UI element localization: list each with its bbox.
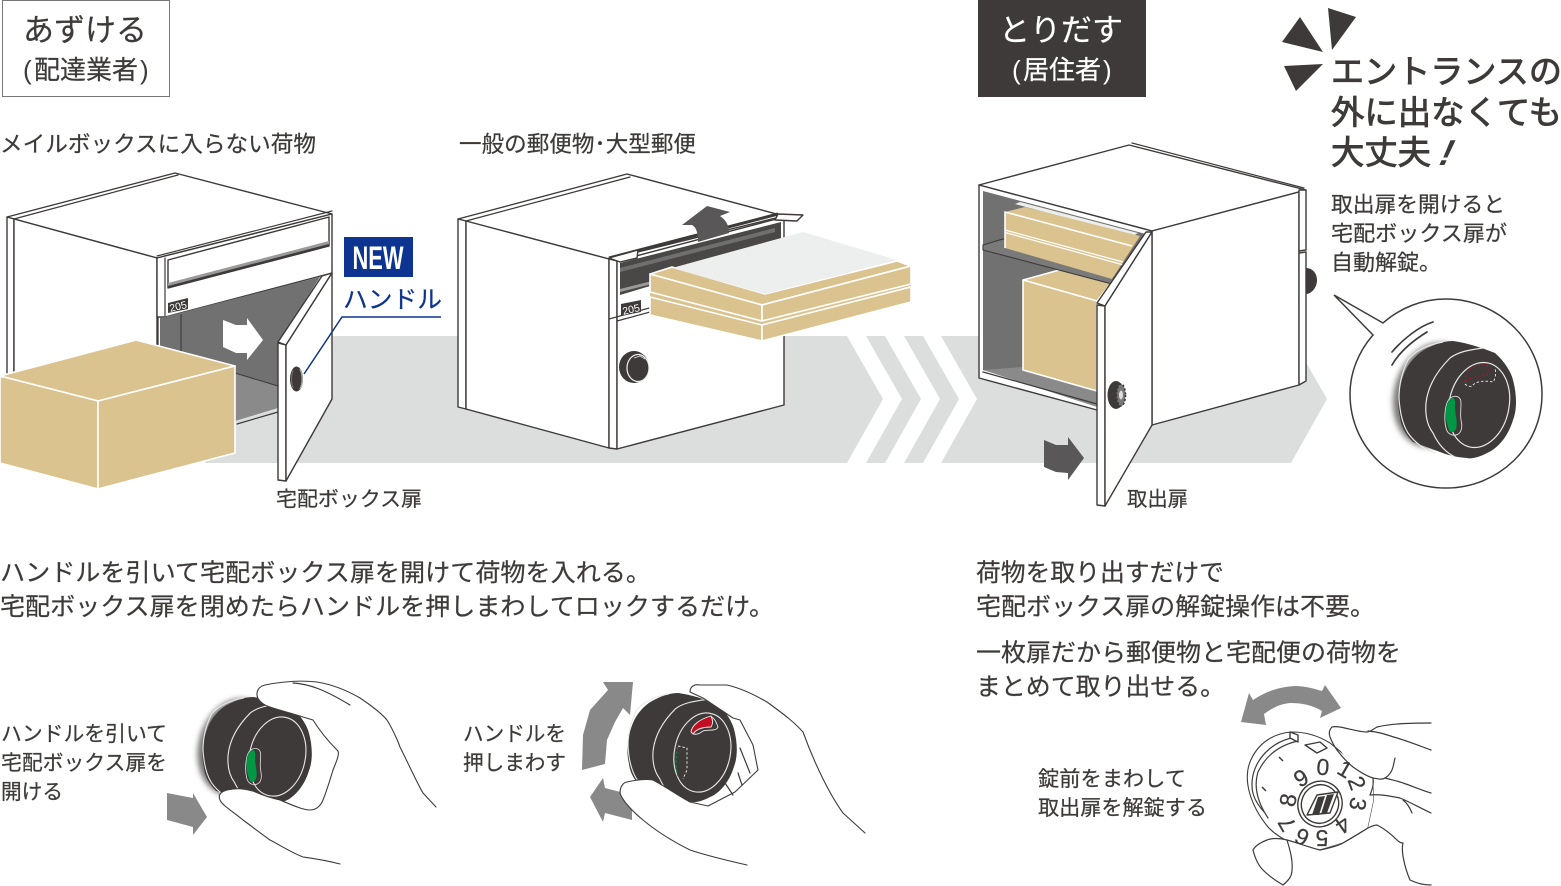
callout body text: 宅配ボックス扉が (1331, 221, 1507, 246)
illustration: mailbox with mail going in (458, 174, 911, 449)
upper shelf (983, 239, 1116, 284)
knob protruding at right (1306, 268, 1317, 294)
heading: あずける: あずける (23, 13, 147, 48)
red indicator (691, 716, 718, 734)
NEW badge (344, 237, 413, 277)
instruction text: right: 一枚扉だから郵便物と宅配便の荷物を (976, 639, 1401, 667)
dial center key (1290, 774, 1350, 834)
hand outline (620, 685, 865, 865)
instruction text: right: 宅配ボックス扉の解錠操作は不要。 (976, 593, 1375, 621)
room number plate: 205 (621, 302, 641, 318)
dial knob (619, 351, 649, 383)
step label: rotate handle (463, 723, 566, 775)
instruction text: left (0, 559, 774, 621)
box interior (160, 277, 320, 386)
instruction text: right (976, 559, 1401, 701)
arrow: white door direction (223, 318, 263, 360)
callout headline: 外に出なくても (1331, 94, 1561, 131)
dial numbers: 2 (1343, 773, 1371, 793)
fingers (1253, 723, 1431, 886)
callout headline (1331, 53, 1561, 173)
illustration: hand rotating handle (620, 685, 865, 865)
illustration: hand pulling handle (187, 681, 436, 864)
step label: pull handle: 開ける (1, 781, 63, 804)
vibration marks (1392, 322, 1433, 365)
instruction text: right: まとめて取り出せる。 (976, 673, 1225, 701)
label: pickup door: 取出扉 (1127, 488, 1188, 511)
step label: pull handle: 宅配ボックス扉を (1, 752, 167, 775)
handle label with leader: ハンドル (343, 287, 442, 314)
green dashed indicator (676, 746, 687, 779)
handle label with leader (304, 287, 442, 374)
dial numbers: 0 (1315, 753, 1331, 781)
dial numbers: 9 (1289, 764, 1313, 792)
step label: pull handle: ハンドルを引いて (1, 723, 167, 746)
hand outline (219, 681, 436, 864)
step label: rotate dial: 錠前をまわして (1038, 768, 1186, 791)
open door (278, 273, 332, 481)
label: delivery box door: 宅配ボックス扉 (276, 488, 422, 511)
step label: pull handle (1, 723, 167, 804)
dial numbers: 4 (1330, 811, 1356, 839)
attention burst icon (1282, 8, 1356, 91)
interior (983, 191, 1146, 402)
dial numbers: 6 (1291, 823, 1313, 851)
mail slot (620, 222, 781, 295)
instruction text: right: 荷物を取り出すだけで (976, 559, 1224, 587)
dial numbers (1273, 753, 1372, 851)
heading: とりだす: とりだす (999, 13, 1123, 48)
heading: あずける: ) (140, 55, 149, 85)
instruction text: left: ハンドルを引いて宅配ボックス扉を開けて荷物を入れる。 (0, 559, 651, 587)
step label: rotate dial: 取出扉を解錠する (1038, 797, 1207, 820)
caption: mailbox items: メイルボックスに入らない荷物 (0, 132, 316, 157)
arrow: rotate both ways (1241, 685, 1341, 725)
callout headline: 大丈夫 (1331, 134, 1431, 171)
heading: とりだす: ) (1103, 55, 1112, 85)
heading: とりだす: 居住者 (1023, 55, 1101, 85)
green indicator (1445, 396, 1462, 435)
stacked large mail (650, 261, 911, 341)
caption: general mail: 一般の郵便物･大型郵便 (459, 132, 696, 157)
step label: rotate handle: 押しまわす (463, 752, 566, 775)
callout body text: 自動解錠。 (1331, 250, 1441, 275)
parcel (0, 340, 235, 489)
dial numbers: 5 (1316, 825, 1328, 851)
door handle (290, 366, 303, 392)
heading: あずける (2, 0, 170, 96)
room number plate: 205 (168, 299, 188, 315)
callout headline: ! (1433, 133, 1462, 173)
gray flow arrow band (205, 336, 1327, 463)
open door (1097, 232, 1152, 506)
thumb (1253, 838, 1320, 885)
lower shelf parcel (1023, 269, 1111, 391)
heading: とりだす (978, 0, 1146, 97)
heading: とりだす: ( (1012, 55, 1021, 85)
dial numbers: 1 (1333, 755, 1357, 783)
callout bubble: lock unlocked (1334, 295, 1542, 488)
heading: あずける: 配達業者 (34, 55, 138, 85)
illustration: mailbox with open delivery door and parcel (0, 173, 332, 489)
white paper on top (672, 232, 897, 294)
step label: rotate handle: ハンドルを (463, 723, 566, 746)
arrow: pull direction (167, 793, 207, 835)
instruction text: left: 宅配ボックス扉を閉めたらハンドルを押しまわしてロックするだけ。 (0, 593, 774, 621)
callout body text: 取出扉を開けると (1331, 192, 1505, 217)
dial numbers: 8 (1274, 791, 1302, 809)
callout headline: エントランスの (1331, 53, 1561, 90)
arrows: rotate direction (582, 682, 633, 822)
callout body text (1331, 192, 1507, 275)
arrow: mail goes up (682, 206, 730, 242)
opening frame (979, 185, 1152, 410)
red dashed indicator (1465, 365, 1488, 382)
illustration: mailbox opened from the rear (979, 143, 1317, 506)
arrow: door direction (1044, 437, 1084, 480)
door dial (1108, 381, 1126, 409)
dial numbers: 7 (1273, 812, 1301, 836)
step label: rotate dial (1038, 768, 1207, 820)
heading: あずける: ( (23, 55, 32, 85)
dial numbers: 3 (1344, 795, 1372, 813)
upper shelf mail (1005, 202, 1140, 279)
illustration: hand turning combination dial (1247, 723, 1431, 886)
NEW badge: NEW (352, 240, 404, 276)
